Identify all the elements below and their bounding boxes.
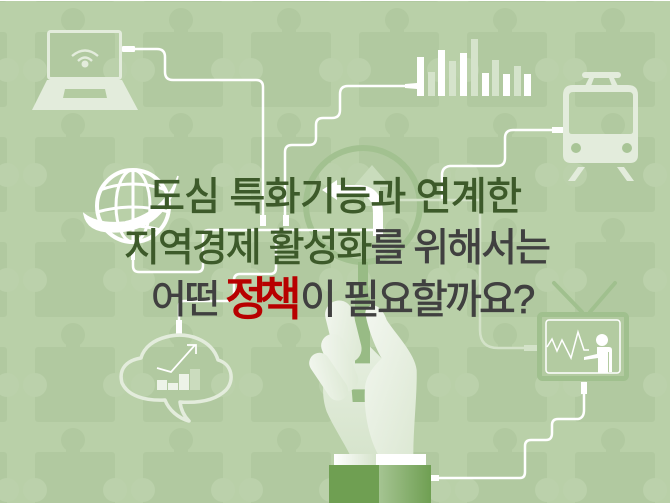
title line 2: 지역경제 활성화를 위해서는 — [124, 227, 551, 270]
title line 3: 필요할까요? — [343, 278, 534, 322]
cable: cloud to center — [179, 230, 276, 320]
icon: television with presenter — [540, 283, 626, 378]
icon: train — [563, 72, 638, 181]
hand — [305, 297, 417, 455]
illustration: hand with sleeve — [305, 297, 431, 503]
cable: sleeve to television — [436, 392, 584, 478]
cable: bar chart to center — [285, 86, 405, 216]
title line 3: 이 — [300, 278, 334, 322]
icon: cloud speech bubble with growth chart — [121, 335, 231, 421]
title line 3: 정책 — [225, 273, 297, 325]
sleeve — [329, 465, 431, 503]
cable plugs — [122, 46, 587, 481]
cable: laptop to center — [135, 49, 263, 216]
title line 1: 도심 특화기능과 연계한 — [149, 176, 522, 219]
icon: globe — [84, 170, 178, 242]
icon: laptop with wifi — [32, 32, 138, 110]
icon: bar chart — [417, 39, 531, 96]
title line 3: 어떤 — [151, 279, 218, 322]
cable: train to center — [442, 130, 552, 200]
magnifier ring with arrows — [306, 148, 420, 362]
cuff — [334, 454, 426, 465]
cable: television to center — [400, 200, 527, 348]
title text — [124, 176, 551, 325]
cable: globe to center — [133, 230, 385, 272]
